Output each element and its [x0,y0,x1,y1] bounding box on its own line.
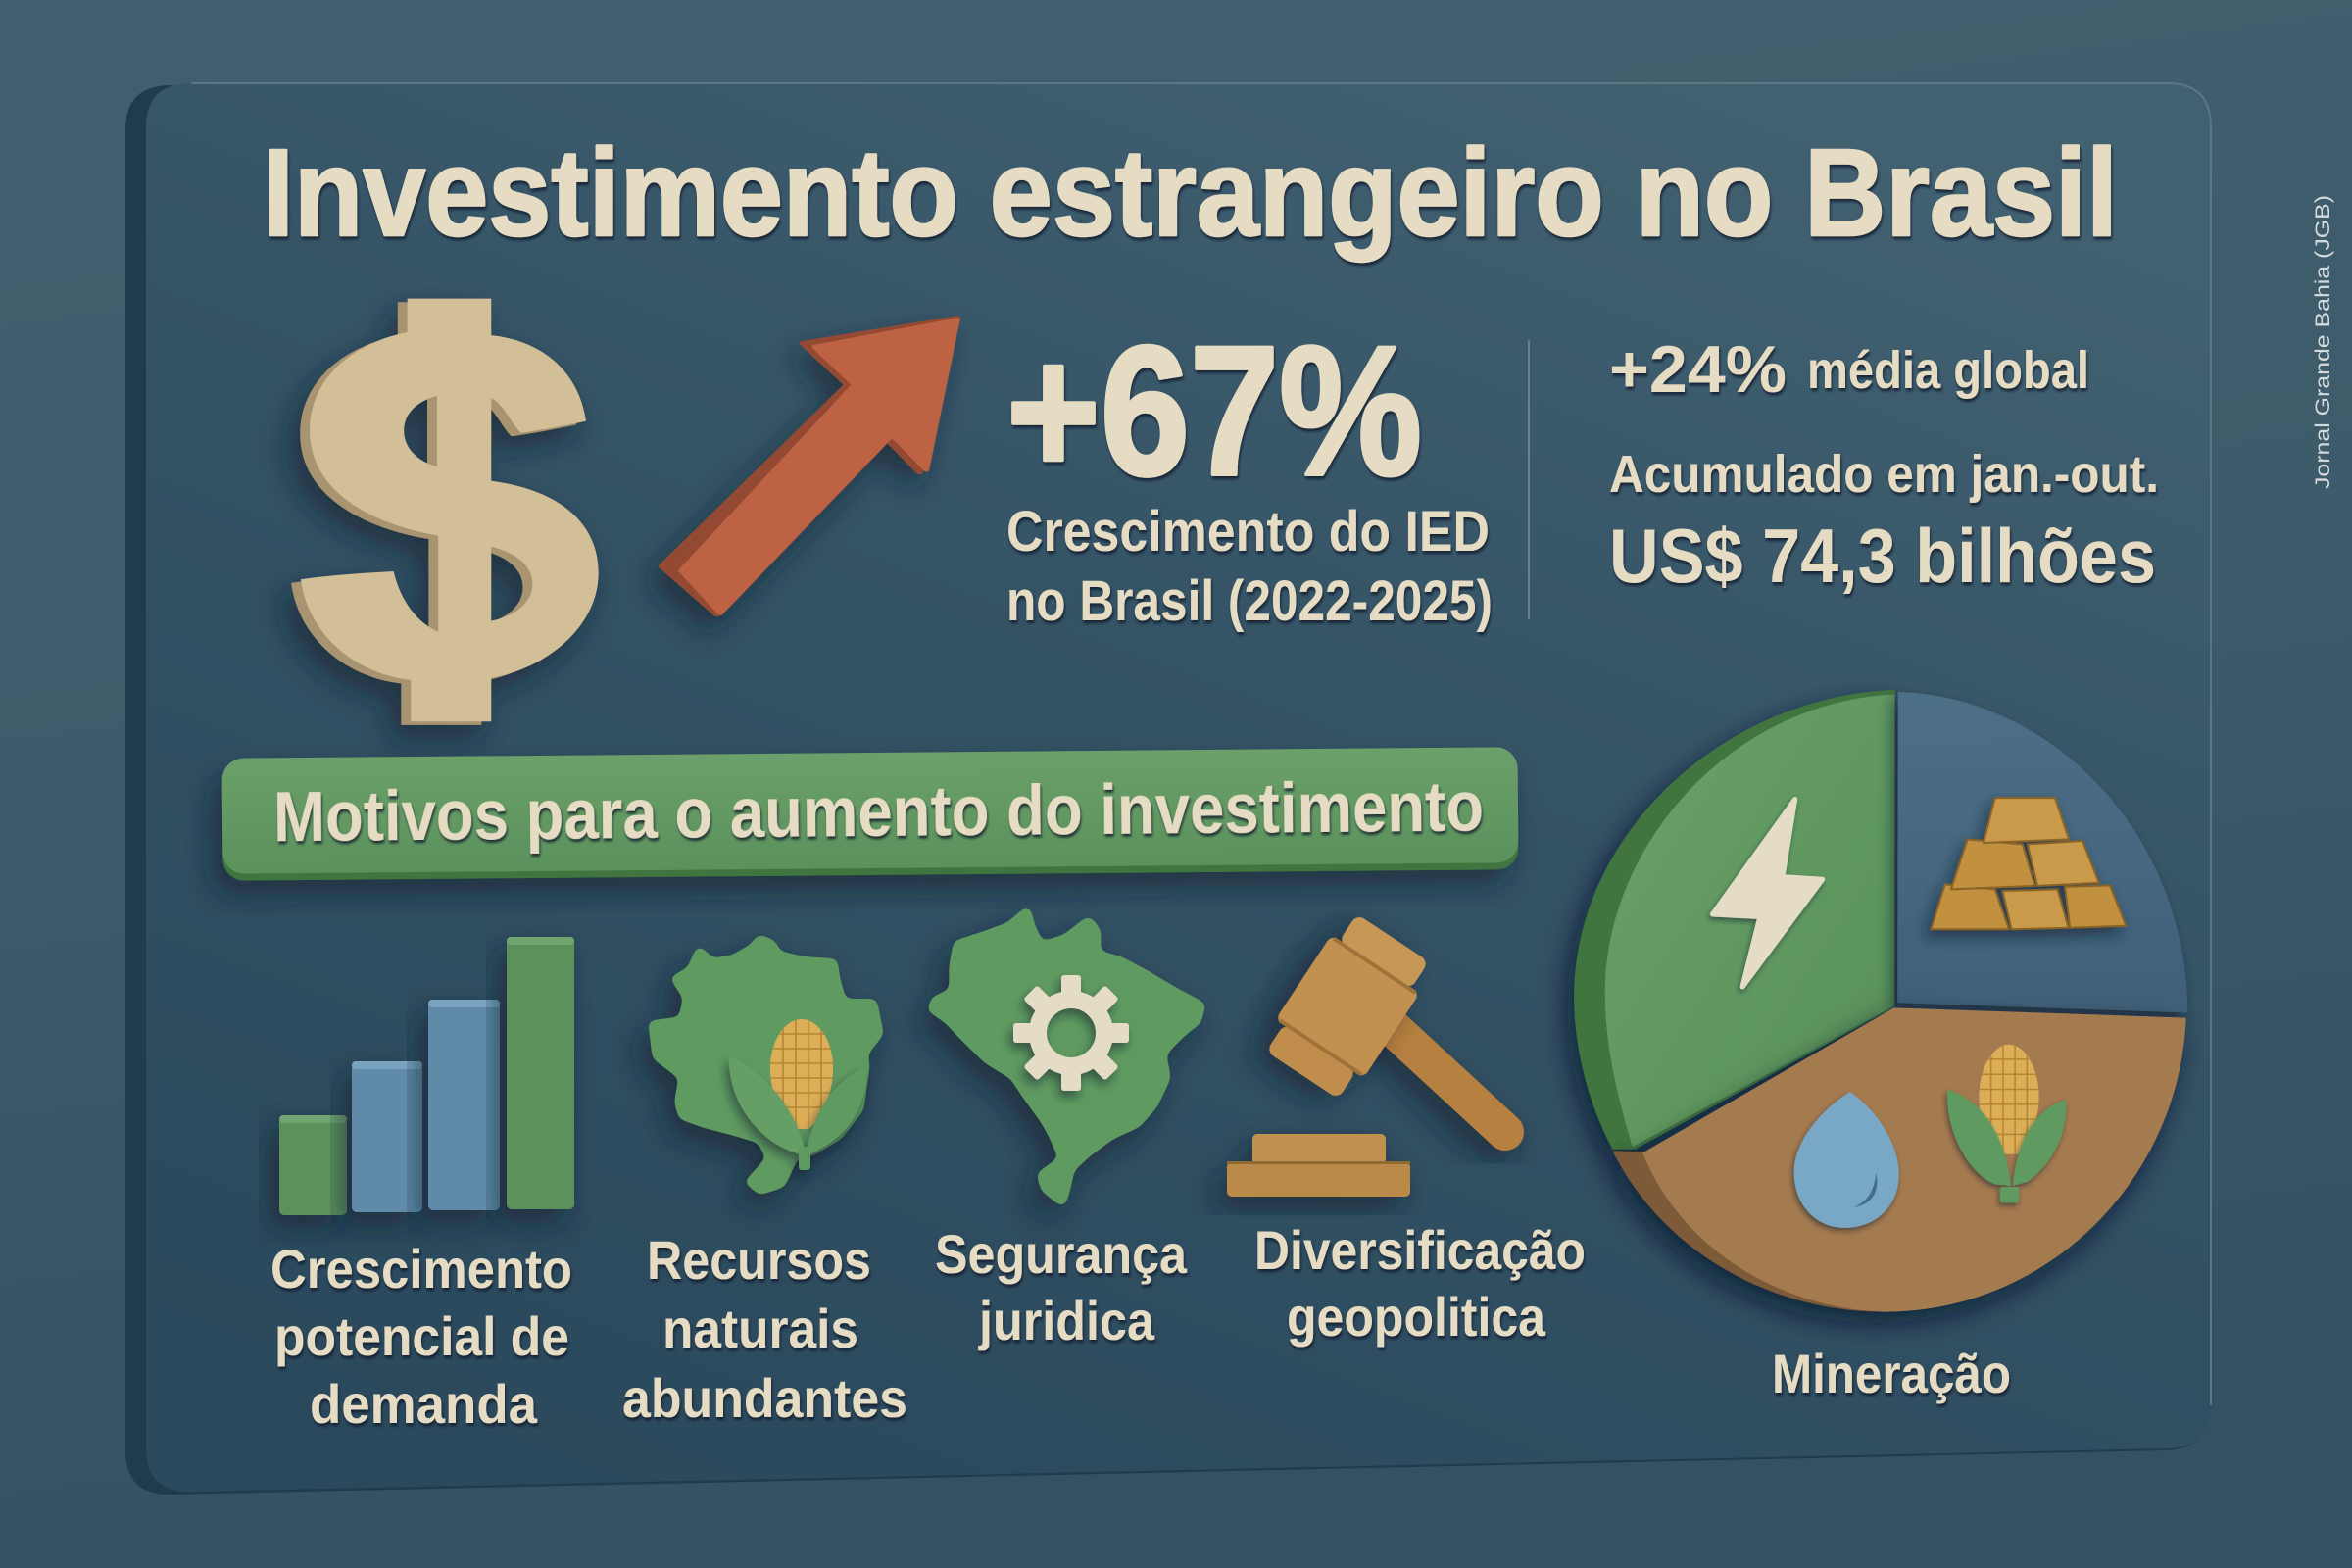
text: growth description: Crescimento do IED [1006,500,1490,564]
slice: agriculture and water [1612,1007,2186,1312]
sub-element: gavel head [1258,908,1437,1104]
title: Investimento estrangeiro no Brasil [263,123,2118,262]
sub-element: gear [1013,975,1129,1091]
text: growth description: no Brasil (2022-2025) [1006,569,1493,633]
sub-element: sound block [1227,1134,1410,1197]
slice: mining gold [1897,692,2187,1012]
sub-element: gavel handle [1391,1026,1505,1132]
label: legal security: juridica [978,1290,1155,1351]
icon: lightning [1712,800,1823,987]
text: accumulated total: Acumulado em jan.-out. [1609,445,2159,504]
banner: reasons heading: Motivos para o aumento do investimento [273,768,1484,857]
sub-element: corn cob [770,1018,833,1130]
label: demand: Crescimento [270,1238,572,1299]
label: natural resources [622,1229,907,1429]
sub-element: corn leaves [729,1056,867,1170]
label: demand: potencial de [274,1305,569,1367]
label: demand [270,1238,572,1435]
text: accumulated total: US$ 74,3 bilhões [1609,513,2156,599]
text: accumulated total [1609,445,2159,599]
statistic: +67%: +67% [1006,308,1422,514]
icon: corn [1947,1045,2066,1202]
label: legal security: Segurança [935,1223,1188,1285]
slice: energy [1574,690,1895,1150]
icon: bar chart [279,937,574,1215]
statistic: global average: média global [1807,341,2089,400]
text: growth description [1006,500,1493,633]
icon: growth arrow [662,318,957,614]
icon: water drop [1794,1092,1899,1228]
icon: dollar sign [291,299,599,725]
label: mining: Mineração [1772,1343,2011,1404]
label: demand: demanda [310,1373,538,1435]
icon: gavel [1227,908,1505,1197]
credit: Jornal Grande Bahia (JGB) [2312,195,2334,489]
main panel [125,83,2211,1494]
icon: Brazil map with corn [651,936,881,1194]
statistic: global average: +24% [1609,332,1787,407]
label: geopolitical diversification: geopolitica [1287,1286,1546,1348]
banner: reasons heading [222,747,1519,881]
statistic: global average [1609,332,2089,407]
label: geopolitical diversification [1254,1219,1586,1348]
icon: gold bars [1931,798,2126,929]
label: natural resources: Recursos [647,1229,871,1291]
label: natural resources: abundantes [622,1367,907,1429]
label: legal security [935,1223,1188,1351]
icon: Brazil map with gear [931,909,1202,1204]
pie chart [1574,690,2187,1312]
label: geopolitical diversification: Diversificação [1254,1219,1586,1281]
label: natural resources: naturais [662,1298,858,1359]
text: reason labels [270,1219,2011,1435]
